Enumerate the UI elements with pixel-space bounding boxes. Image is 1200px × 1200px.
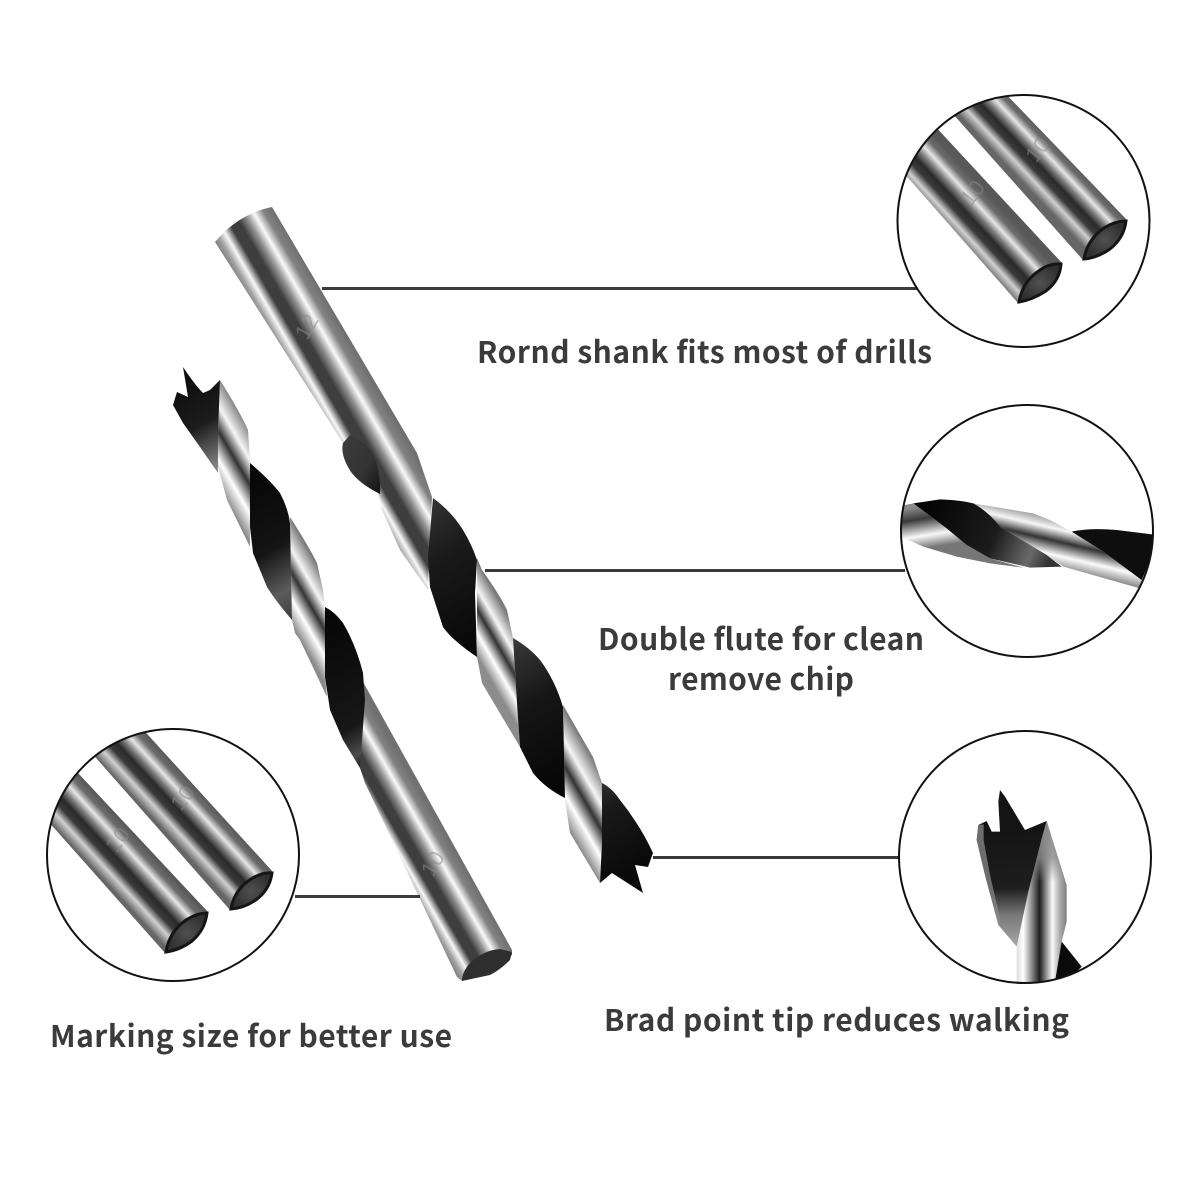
circle outline	[899, 731, 1151, 983]
drill bit: long right bit	[215, 207, 653, 893]
detail circle: brad point tip	[899, 731, 1151, 983]
shank	[360, 680, 512, 981]
shank end cap	[462, 949, 512, 981]
leader line: double flute	[485, 569, 905, 572]
tip close-up	[977, 790, 1082, 983]
detail circle: round shanks	[896, 94, 1150, 348]
tip flute	[173, 367, 220, 473]
flute close-up	[897, 499, 1157, 588]
twist metal top	[218, 380, 250, 547]
caption line one: Double flute for clean	[598, 615, 924, 659]
flute two	[513, 638, 565, 798]
size mark 12: 12	[290, 310, 324, 344]
circle outline	[898, 95, 1150, 347]
shank rods	[906, 96, 1128, 304]
twist metal middle	[290, 517, 327, 697]
shank rods: 10	[955, 175, 990, 210]
leader line: marking	[295, 895, 420, 898]
small flute run-out	[342, 435, 380, 494]
drill bit: short left bit	[173, 367, 512, 981]
caption line two: remove chip	[668, 655, 854, 699]
size mark 10: 10	[416, 847, 450, 880]
marked rods: 10	[100, 822, 135, 857]
caption: double flute	[598, 615, 924, 699]
shank rods: 10	[1020, 132, 1055, 167]
flute two	[325, 607, 365, 768]
circle outline	[47, 729, 299, 981]
leader line: brad point	[653, 856, 900, 859]
brad point tip	[600, 783, 653, 893]
marked rods	[52, 733, 274, 954]
caption: brad point tip: Brad point tip reduces walking	[604, 996, 1069, 1040]
caption: round shank: Rornd shank fits most of drills	[477, 328, 932, 372]
twist metal lower	[563, 705, 602, 883]
infographic canvas	[46, 94, 1154, 1054]
caption: marking size: Marking size for better use	[50, 1012, 452, 1056]
shank and upper twist	[215, 207, 432, 590]
marked rods: 10	[165, 780, 200, 815]
detail circle: double flute	[897, 405, 1157, 657]
flute one	[428, 498, 477, 657]
twist metal middle	[477, 558, 520, 747]
flute one	[250, 463, 292, 620]
circle outline	[901, 405, 1153, 657]
detail circle: size marking	[46, 728, 300, 982]
leader line: round shank	[322, 287, 917, 290]
